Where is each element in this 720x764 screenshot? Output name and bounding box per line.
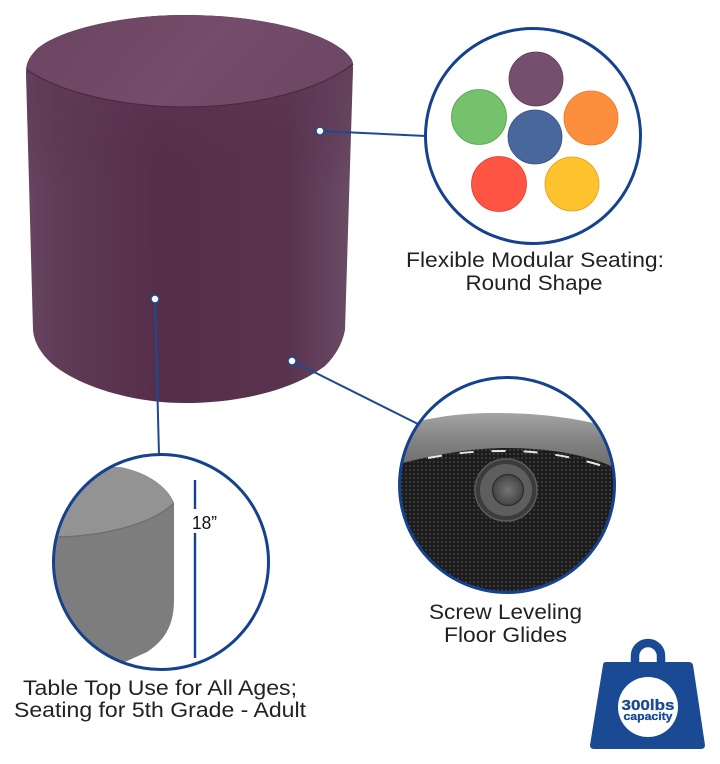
- label: screw leveling floor glides: Screw Leveling: [429, 601, 582, 624]
- connector: height callout: [151, 295, 159, 455]
- callout: height detail: [40, 454, 268, 680]
- label: table top use: Seating for 5th Grade - Adult: [14, 699, 306, 722]
- connector: floor glides callout: [288, 357, 418, 424]
- swatch: purple: [509, 52, 563, 106]
- icon: weight capacity: [590, 643, 705, 749]
- dimension label: 18”: [192, 512, 217, 533]
- dimension line: [194, 480, 196, 658]
- swatch: blue: [508, 110, 562, 164]
- connector: top-right callout: [316, 127, 426, 136]
- label: flexible modular seating: Round Shape: [466, 272, 602, 295]
- label: flexible modular seating: Flexible Modular Seating:: [406, 249, 664, 272]
- floor glide: [475, 459, 537, 521]
- swatch: red: [472, 156, 526, 212]
- swatch: green: [452, 90, 506, 144]
- capacity text: capacity: [624, 711, 673, 723]
- ottoman product photo: [26, 15, 353, 403]
- callout: colour options: [426, 28, 640, 244]
- capacity text: 300lbs: [622, 697, 674, 714]
- swatch: yellow: [545, 157, 599, 211]
- label: table top use: Table Top Use for All Ages;: [23, 677, 297, 700]
- label: screw leveling floor glides: Floor Glides: [444, 624, 567, 647]
- stitching: [428, 451, 603, 466]
- callout: floor glide detail: [395, 378, 620, 600]
- swatch: orange: [564, 91, 618, 145]
